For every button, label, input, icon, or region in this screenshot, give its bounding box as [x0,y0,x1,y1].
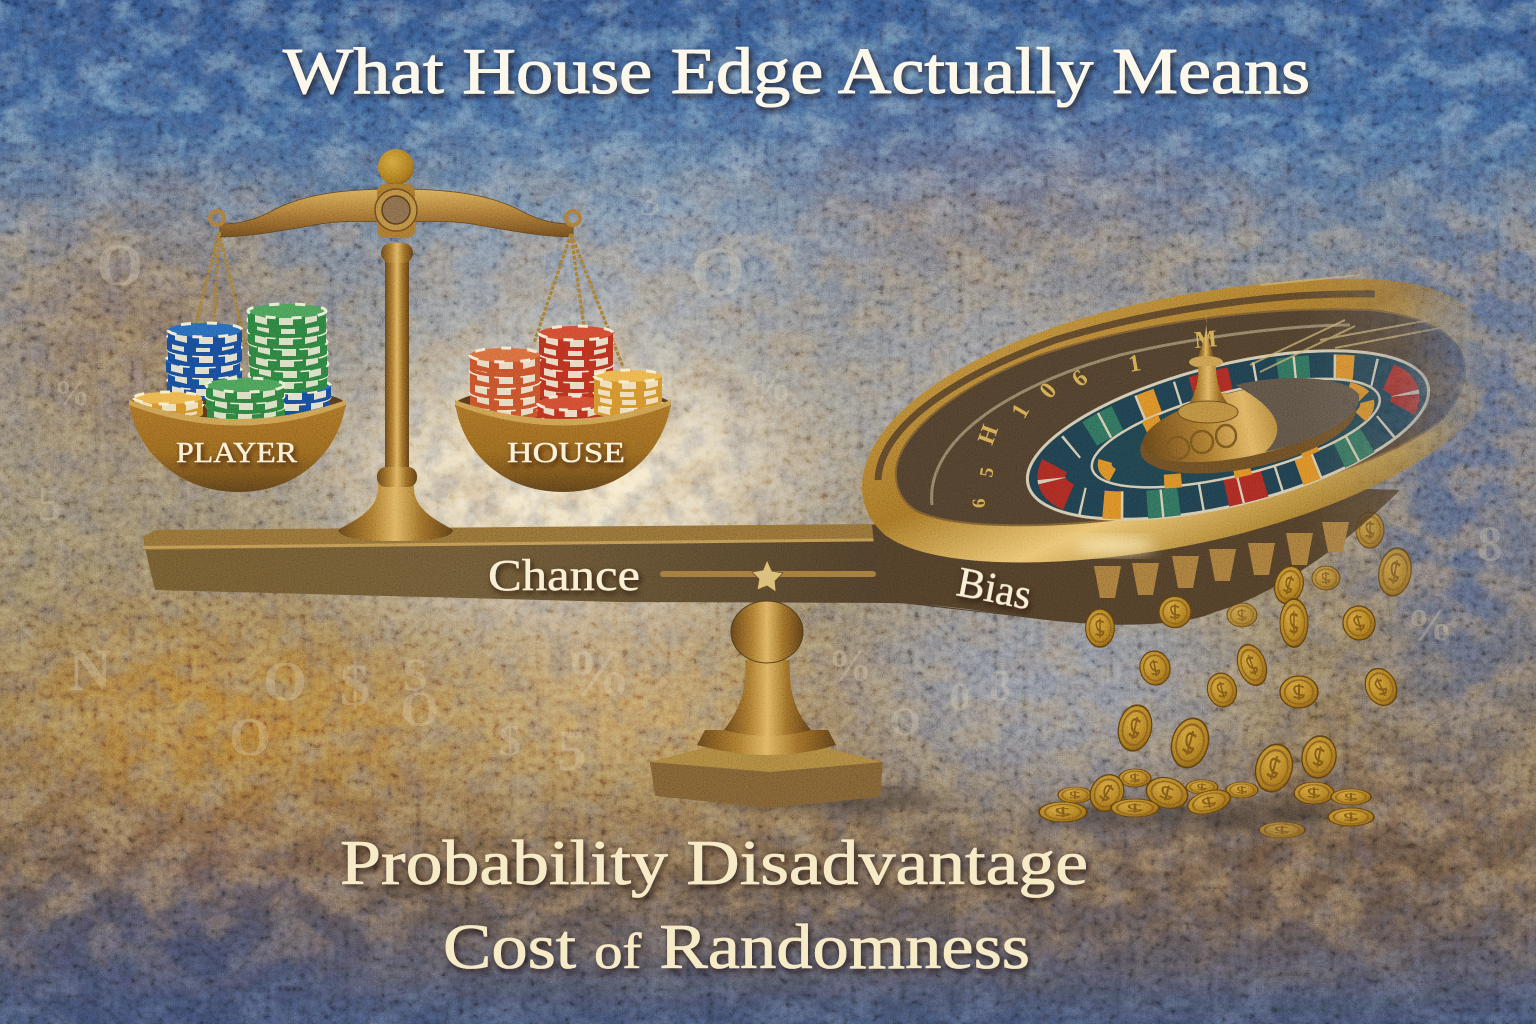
faded probability symbols: % [565,637,631,710]
track numerals: M [1193,326,1218,354]
slider star [752,560,783,592]
faded probability symbols: N [68,637,112,703]
track numerals: 0 [1035,378,1062,404]
house chips [470,326,662,430]
faded probability symbols: O [401,680,439,736]
pedestal neck [724,660,811,736]
faded probability symbols: 5 [558,718,586,783]
wheel outer rim [862,279,1495,562]
coin pile [1030,733,1374,838]
faded probability symbols: O [263,651,307,713]
track groove [932,325,1350,505]
pedestal shadow [710,788,950,812]
rim upper dark band [878,294,1375,480]
faded probability symbols: % [828,641,872,690]
faded probability symbols: O [229,707,271,767]
medallion [375,184,417,238]
pile shadow [1030,801,1370,829]
label: player: PLAYER [176,437,298,469]
wheel track [896,309,1465,525]
rim highlight [1075,538,1155,554]
beam arms [220,189,573,237]
fulcrum pedestal [650,601,950,812]
faded probability symbols [38,179,1502,783]
faded probability symbols: 5 [38,475,62,531]
top knob [378,149,414,185]
falling coins [1086,563,1403,772]
faded probability symbols: O [691,234,745,311]
hub base [1132,368,1364,490]
track numerals: 1 [1007,400,1035,423]
label: house: HOUSE [507,437,625,469]
hub shaded side [1235,378,1359,452]
faded probability symbols: 8 [989,661,1011,710]
subtitle line two: Cost of Randomness [443,911,1030,982]
track numerals: 1 [1127,350,1143,378]
faded probability symbols: % [1407,599,1453,650]
faded probability symbols: 0 [950,674,970,719]
scalloped underside ornaments [1094,522,1349,598]
faded probability symbols: % [54,373,90,413]
title: What House Edge Actually Means [283,35,1310,108]
faded probability symbols: O [97,232,143,298]
house pan [455,400,671,492]
faded probability symbols: S [402,649,428,700]
faded probability symbols: O [889,699,921,744]
faded probability symbols: $ [499,716,521,765]
player pan back [130,387,346,423]
motion streaks [1250,275,1440,372]
roulette wheel [862,275,1495,625]
plank balance beam [143,524,1068,622]
hub ornament [1167,425,1236,459]
number ring [1026,349,1430,521]
hub finial [1178,313,1238,423]
wheel underside [872,480,1400,625]
track numerals: 5 [976,466,999,479]
faded probability symbols: % [748,361,792,410]
faded probability symbols: $ [340,652,370,718]
balance scale [129,149,671,541]
scale post [385,255,409,475]
scale foot [338,484,453,541]
track numerals: 6 [969,498,990,508]
label: bias: Bias [953,560,1035,619]
faded probability symbols: 8 [1478,515,1502,571]
faded probability symbols: 3 [640,179,660,224]
house pan back [455,387,671,423]
pedestal base [650,745,883,808]
player pan [129,400,346,492]
track numerals: H [973,421,1004,448]
label: chance: Chance [488,551,640,600]
falling coins behind wheel [1227,512,1415,627]
chains [196,232,623,367]
subtitle line one: Probability Disadvantage [340,827,1088,898]
player chips [134,304,331,424]
track numerals [969,326,1218,508]
track numerals: 6 [1067,365,1093,393]
chance slider [660,560,876,592]
pivot ball [731,601,803,663]
pedestal step [697,730,836,755]
plank top surface [143,524,880,550]
